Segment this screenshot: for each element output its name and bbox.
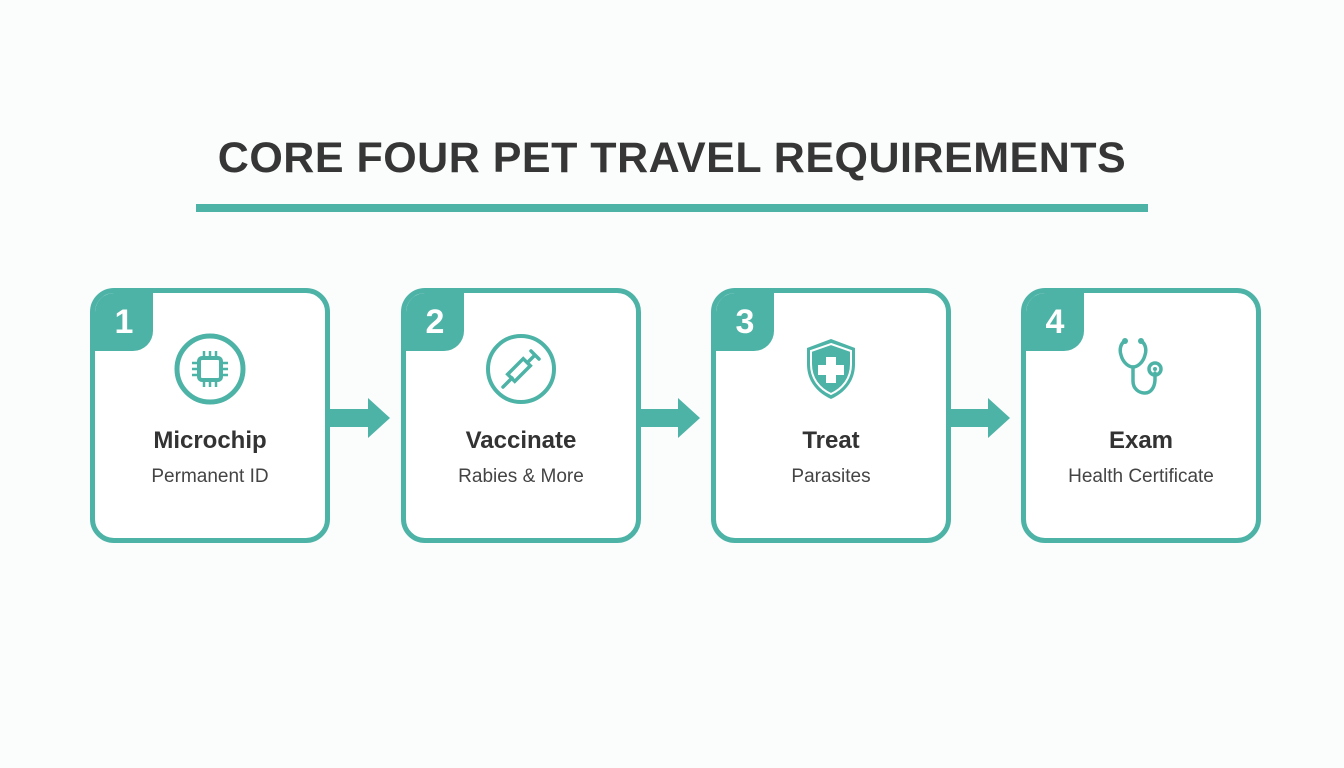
panel: step 4 exam — [1021, 288, 1261, 543]
badge 1: 1 — [115, 303, 133, 341]
arrow 1 — [330, 398, 390, 438]
badge 1 — [95, 293, 153, 351]
icon: shield — [807, 339, 855, 399]
panel: step 3 treat: Parasites — [791, 466, 871, 487]
icon: syringe — [486, 334, 556, 404]
badge 3 — [716, 293, 774, 351]
panel: step 2 vaccinate: Rabies & More — [458, 466, 584, 487]
panel: step 2 vaccinate — [401, 288, 641, 543]
badge 4 — [1026, 293, 1084, 351]
badge 3: 3 — [736, 303, 754, 341]
panel: step 4 exam: Health Certificate — [1068, 466, 1214, 487]
panel: step 3 treat — [711, 288, 951, 543]
label: Vaccinate — [466, 427, 576, 454]
icon: microchip — [174, 334, 246, 404]
label: Exam — [1109, 427, 1173, 454]
panel: step 1 microchip — [90, 288, 330, 543]
badge 2: 2 — [426, 303, 444, 341]
label: Treat — [802, 427, 860, 454]
badge 4: 4 — [1046, 303, 1064, 341]
arrow 2 — [641, 398, 700, 438]
arrow 3 — [951, 398, 1010, 438]
icon: stethoscope — [1118, 338, 1163, 395]
label: Microchip — [153, 427, 267, 454]
title: CORE FOUR PET TRAVEL REQUIREMENTS — [218, 134, 1126, 182]
panel: step 1 microchip: Permanent ID — [151, 466, 269, 487]
badge 2 — [406, 293, 464, 351]
